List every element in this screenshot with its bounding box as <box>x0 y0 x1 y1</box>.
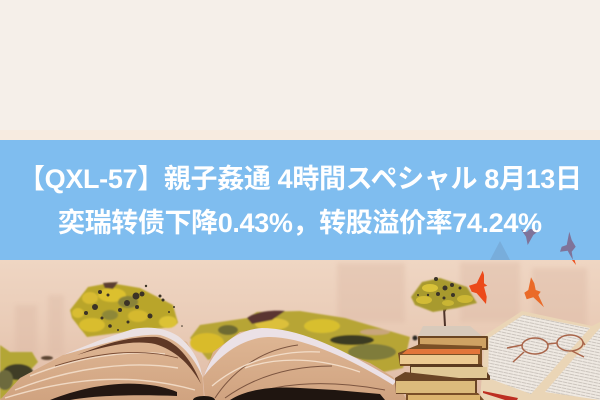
icon: small tree on books <box>411 277 477 326</box>
left page dark underside <box>50 384 177 400</box>
faint spire inside band <box>490 241 510 260</box>
icon: purple birds <box>521 229 576 260</box>
right page lines <box>215 345 385 400</box>
ribbon <box>483 391 518 400</box>
right page block <box>203 328 407 400</box>
title <box>18 164 582 238</box>
book spine <box>193 396 215 400</box>
left page block <box>0 330 204 400</box>
faint city skyline <box>15 262 587 355</box>
right page white edge <box>204 328 396 385</box>
tree foliage: far left <box>0 345 53 400</box>
left page lines <box>5 353 195 398</box>
right bible page <box>545 328 600 400</box>
left page dark leaf <box>77 337 201 384</box>
icon: open book <box>0 328 407 400</box>
bible block <box>480 311 600 400</box>
blue title band <box>0 140 600 260</box>
icon: stack of books <box>395 326 490 400</box>
tree foliage: left <box>70 282 183 337</box>
tree foliage: behind book centre <box>190 311 418 385</box>
left page white edge <box>63 328 203 378</box>
left bible page <box>488 315 590 394</box>
icon: orange birds <box>469 258 576 307</box>
title line 1: 【QXL-57】親子姦通 4時間スペシャル 8月13日 <box>18 164 582 194</box>
glasses <box>507 335 585 362</box>
icon: open bible with glasses <box>480 311 600 400</box>
title line 2: 奕瑞转债下降0.43%，转股溢价率74.24% <box>58 208 542 238</box>
right page dark underside <box>230 388 385 400</box>
